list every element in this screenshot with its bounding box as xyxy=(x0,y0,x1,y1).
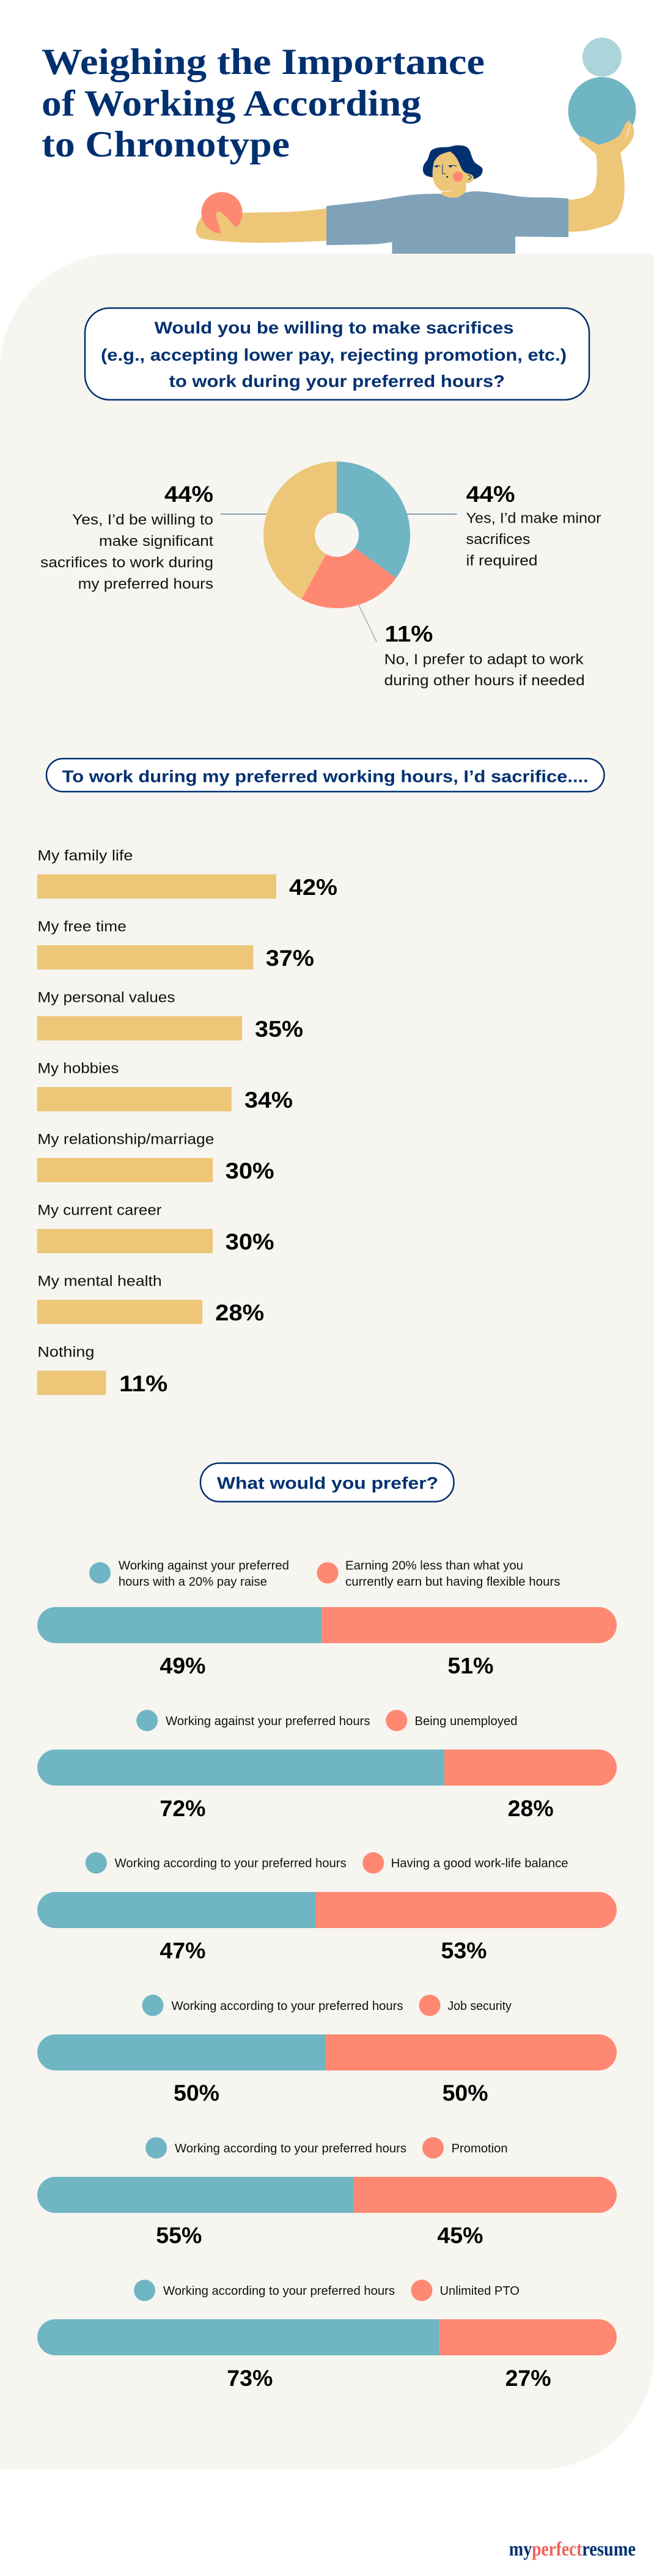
title xyxy=(42,42,485,164)
comparison 2: against hours vs unemployed: Working against your preferred hours xyxy=(166,1715,370,1728)
callout: 44% minor sacrifices xyxy=(466,482,601,569)
thumb on coral ball xyxy=(216,212,237,236)
callout: 44% minor sacrifices: 44% xyxy=(466,482,515,507)
callout: 44% minor sacrifices: if required xyxy=(466,553,538,569)
logo: myperfectresume: perfect xyxy=(532,2539,582,2561)
comparison 2: against hours vs unemployed: Being unemployed xyxy=(414,1715,517,1728)
finger highlight xyxy=(626,124,630,137)
bar: personal values: My personal values xyxy=(37,989,175,1006)
heading pill: I'd sacrifice: To work during my preferred working hours, I’d sacrifice.... xyxy=(62,767,589,786)
bar: nothing: 11% xyxy=(119,1371,167,1396)
comparison 6: preferred hours vs unlimited PTO xyxy=(37,2280,617,2391)
comparison 6: preferred hours vs unlimited PTO: 73% xyxy=(227,2366,273,2391)
heading pill: what would you prefer: What would you prefer? xyxy=(217,1474,438,1493)
comparison 6: preferred hours vs unlimited PTO: 27% xyxy=(505,2366,551,2391)
callout: 44% significant sacrifices: 44% xyxy=(164,482,213,507)
bar: family life: My family life xyxy=(37,847,133,864)
t-shirt xyxy=(326,191,568,254)
callout: 44% minor sacrifices: Yes, I’d make minor xyxy=(466,510,601,526)
bar: free time: My free time xyxy=(37,918,127,935)
comparison 1: pay raise vs flexible hours: Working against your preferred xyxy=(119,1559,289,1572)
bar: personal values: 35% xyxy=(255,1017,303,1042)
icon: coral ball xyxy=(201,192,243,234)
bar: mental health: 28% xyxy=(215,1300,264,1325)
icon: light teal ball xyxy=(582,38,622,77)
comparison 1: pay raise vs flexible hours: hours with a 20% pay raise xyxy=(119,1575,267,1589)
comparison 3: preferred hours vs balance: 53% xyxy=(441,1938,487,1963)
comparison 6: preferred hours vs unlimited PTO: Unlimited PTO xyxy=(440,2284,520,2298)
bar: current career: My current career xyxy=(37,1202,161,1218)
left arm and hand xyxy=(196,208,326,243)
callout: 44% significant sacrifices: sacrifices to work during xyxy=(40,554,213,571)
comparison 1: pay raise vs flexible hours: Earning 20% less than what you xyxy=(345,1559,523,1572)
comparison 2: against hours vs unemployed xyxy=(37,1710,617,1821)
bar: family life xyxy=(37,847,337,900)
callout: 44% significant sacrifices: make significant xyxy=(99,533,213,550)
comparison 4: preferred hours vs job security: Job security xyxy=(447,2000,512,2013)
title: of Working According xyxy=(42,83,421,123)
callout: 11% adapt: 11% xyxy=(384,621,433,646)
question box: sacrifices: Would you be willing to make sacrifices xyxy=(155,318,514,337)
comparison 6: preferred hours vs unlimited PTO: Working according to your preferred hours xyxy=(163,2284,395,2298)
bar: relationship xyxy=(37,1131,274,1183)
callout: 44% significant sacrifices: Yes, I’d be willing to xyxy=(72,512,213,528)
bar: family life: 42% xyxy=(289,875,337,900)
donut slice: adapt xyxy=(301,548,396,608)
bar: hobbies xyxy=(37,1060,293,1113)
comparison 4: preferred hours vs job security xyxy=(37,1995,617,2106)
comparison 3: preferred hours vs balance: 47% xyxy=(160,1938,205,1963)
callout: 44% minor sacrifices: sacrifices xyxy=(466,531,531,548)
callout: 44% significant sacrifices xyxy=(40,482,213,592)
logo: myperfectresume: my xyxy=(509,2539,532,2561)
bar: free time xyxy=(37,918,314,971)
bar: hobbies: 34% xyxy=(244,1087,293,1113)
bar: hobbies: My hobbies xyxy=(37,1060,119,1076)
bar: personal values xyxy=(37,989,303,1042)
callout: 11% adapt: during other hours if needed xyxy=(384,672,585,689)
comparison 4: preferred hours vs job security: 50% xyxy=(443,2081,488,2106)
comparison 4: preferred hours vs job security: Working according to your preferred hours xyxy=(171,2000,403,2013)
bar: relationship: 30% xyxy=(226,1158,274,1183)
question box: sacrifices xyxy=(85,308,589,400)
comparison 3: preferred hours vs balance xyxy=(37,1852,617,1963)
cheek xyxy=(453,172,463,182)
callout: 11% adapt xyxy=(384,621,585,689)
comparison 2: against hours vs unemployed: 28% xyxy=(508,1796,554,1821)
icon: teal ball xyxy=(568,77,636,145)
eyes and nose xyxy=(434,164,471,179)
comparison 5: preferred hours vs promotion: Working according to your preferred hours xyxy=(175,2142,406,2155)
bar: relationship: My relationship/marriage xyxy=(37,1131,214,1147)
bar: mental health: My mental health xyxy=(37,1273,162,1289)
bar: current career: 30% xyxy=(226,1229,274,1254)
bar: nothing: Nothing xyxy=(37,1344,94,1360)
question box: sacrifices: to work during your preferred hours? xyxy=(169,372,505,391)
bar chart: sacrifices xyxy=(37,847,337,1396)
logo: myperfectresume: resume xyxy=(582,2539,636,2561)
logo: myperfectresume xyxy=(509,2539,636,2561)
bar: free time: 37% xyxy=(266,946,314,971)
hair xyxy=(423,145,483,179)
comparison 3: preferred hours vs balance: Having a good work-life balance xyxy=(391,1857,568,1871)
callout: 11% adapt: No, I prefer to adapt to work xyxy=(384,651,584,668)
title: to Chronotype xyxy=(42,124,290,164)
comparison 1: pay raise vs flexible hours xyxy=(37,1559,617,1679)
smile xyxy=(441,190,452,191)
donut slice: minor sacrifices xyxy=(337,462,410,578)
comparison 1: pay raise vs flexible hours: currently earn but having flexible hours xyxy=(345,1575,560,1589)
comparison 1: pay raise vs flexible hours: 51% xyxy=(447,1653,493,1679)
heading pill: I'd sacrifice xyxy=(46,759,604,792)
comparison 5: preferred hours vs promotion: 55% xyxy=(156,2223,202,2248)
comparison 5: preferred hours vs promotion: 45% xyxy=(437,2223,483,2248)
comparison 2: against hours vs unemployed: 72% xyxy=(160,1796,205,1821)
comparison 1: pay raise vs flexible hours: 49% xyxy=(160,1653,205,1679)
bar: nothing xyxy=(37,1344,167,1396)
heading pill: what would you prefer xyxy=(200,1463,454,1501)
donut chart xyxy=(263,462,410,608)
comparison 4: preferred hours vs job security: 50% xyxy=(174,2081,219,2106)
leader lines xyxy=(221,514,457,642)
question box: sacrifices: (e.g., accepting lower pay, rejecting promotion, etc.) xyxy=(101,345,567,364)
title: Weighing the Importance xyxy=(42,42,485,82)
comparison 5: preferred hours vs promotion: Promotion xyxy=(452,2142,508,2155)
comparison 5: preferred hours vs promotion xyxy=(37,2137,617,2248)
callout: 44% significant sacrifices: my preferred hours xyxy=(78,576,213,592)
bar: current career xyxy=(37,1202,274,1254)
face and neck xyxy=(433,152,474,198)
comparison 3: preferred hours vs balance: Working according to your preferred hours xyxy=(115,1857,347,1871)
right arm and hand xyxy=(568,120,634,232)
illustration: person balancing balls xyxy=(196,38,636,254)
bar: mental health xyxy=(37,1273,264,1325)
donut slice: significant sacrifices xyxy=(263,462,337,599)
